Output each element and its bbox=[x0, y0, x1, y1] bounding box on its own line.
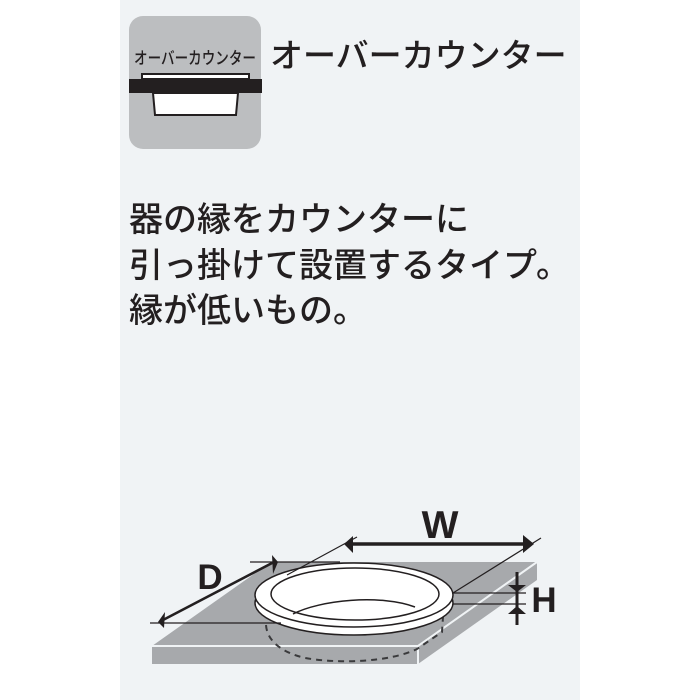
H dimension bbox=[453, 572, 557, 625]
hidden bowl outline bbox=[266, 617, 443, 661]
background panel bbox=[120, 0, 580, 700]
basin rim bbox=[255, 563, 453, 635]
D dimension bbox=[150, 537, 357, 628]
icon: over-counter cross-section badge: オーバーカウンター bbox=[134, 49, 256, 68]
D dimension: D bbox=[197, 558, 223, 597]
description text: 引っ掛けて設置するタイプ。 bbox=[129, 247, 570, 285]
W dimension: W bbox=[422, 504, 459, 547]
icon: over-counter cross-section badge bbox=[129, 16, 262, 149]
description text: 器の縁をカウンターに bbox=[129, 201, 469, 239]
W dimension bbox=[344, 504, 541, 593]
description text: 縁が低いもの。 bbox=[129, 292, 367, 330]
counter slab bbox=[152, 562, 537, 664]
H dimension: H bbox=[531, 581, 557, 620]
title: オーバーカウンター bbox=[270, 37, 567, 74]
description text bbox=[129, 201, 570, 330]
